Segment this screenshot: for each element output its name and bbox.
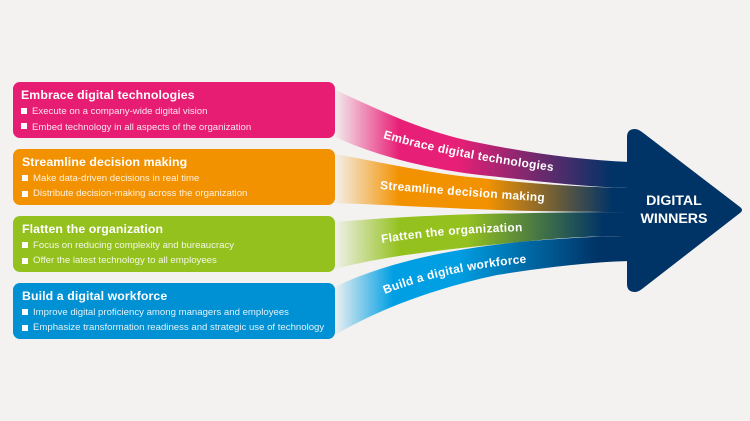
panel: build a digital workforce [13,283,335,339]
ribbon: embrace digital technologies [336,90,627,188]
heading: Streamline decision making [22,154,187,168]
ribbon: streamline decision making: Streamline decision making [380,181,544,204]
ribbon: flatten the organization: Flatten the organization [381,223,522,243]
arrow: digital winners: DIGITAL [646,193,702,209]
heading: Flatten the organization [22,222,163,236]
bullet one: Execute on a company-wide digital vision [32,106,207,117]
bullet two: Offer the latest technology to all employees [33,255,217,266]
bullet one: Make data-driven decisions in real time [33,173,199,184]
ribbon: embrace digital technologies: Embrace digital technologies [384,130,553,171]
panel: flatten the organization [13,216,335,272]
panel: streamline decision making [13,149,335,205]
arrow: digital winners: WINNERS [640,211,708,227]
ribbon: flatten the organization [336,212,627,268]
bullet two: Distribute decision-making across the organization [33,188,247,199]
ribbon: build a digital workforce [336,236,627,334]
ribbon: streamline decision making [336,154,627,212]
panel: embrace digital technologies [13,82,335,138]
bullet two: Emphasize transformation readiness and strategic use of technology [33,322,324,333]
bullet one: Improve digital proficiency among managers and employees [33,307,289,318]
bullet two: Embed technology in all aspects of the organization [32,122,251,133]
bullet one: Focus on reducing complexity and bureaucracy [33,240,234,251]
arrow: digital winners [627,129,742,292]
heading: Embrace digital technologies [21,88,195,102]
ribbon: build a digital workforce: Build a digital workforce [382,256,526,294]
heading: Build a digital workforce [22,288,167,302]
